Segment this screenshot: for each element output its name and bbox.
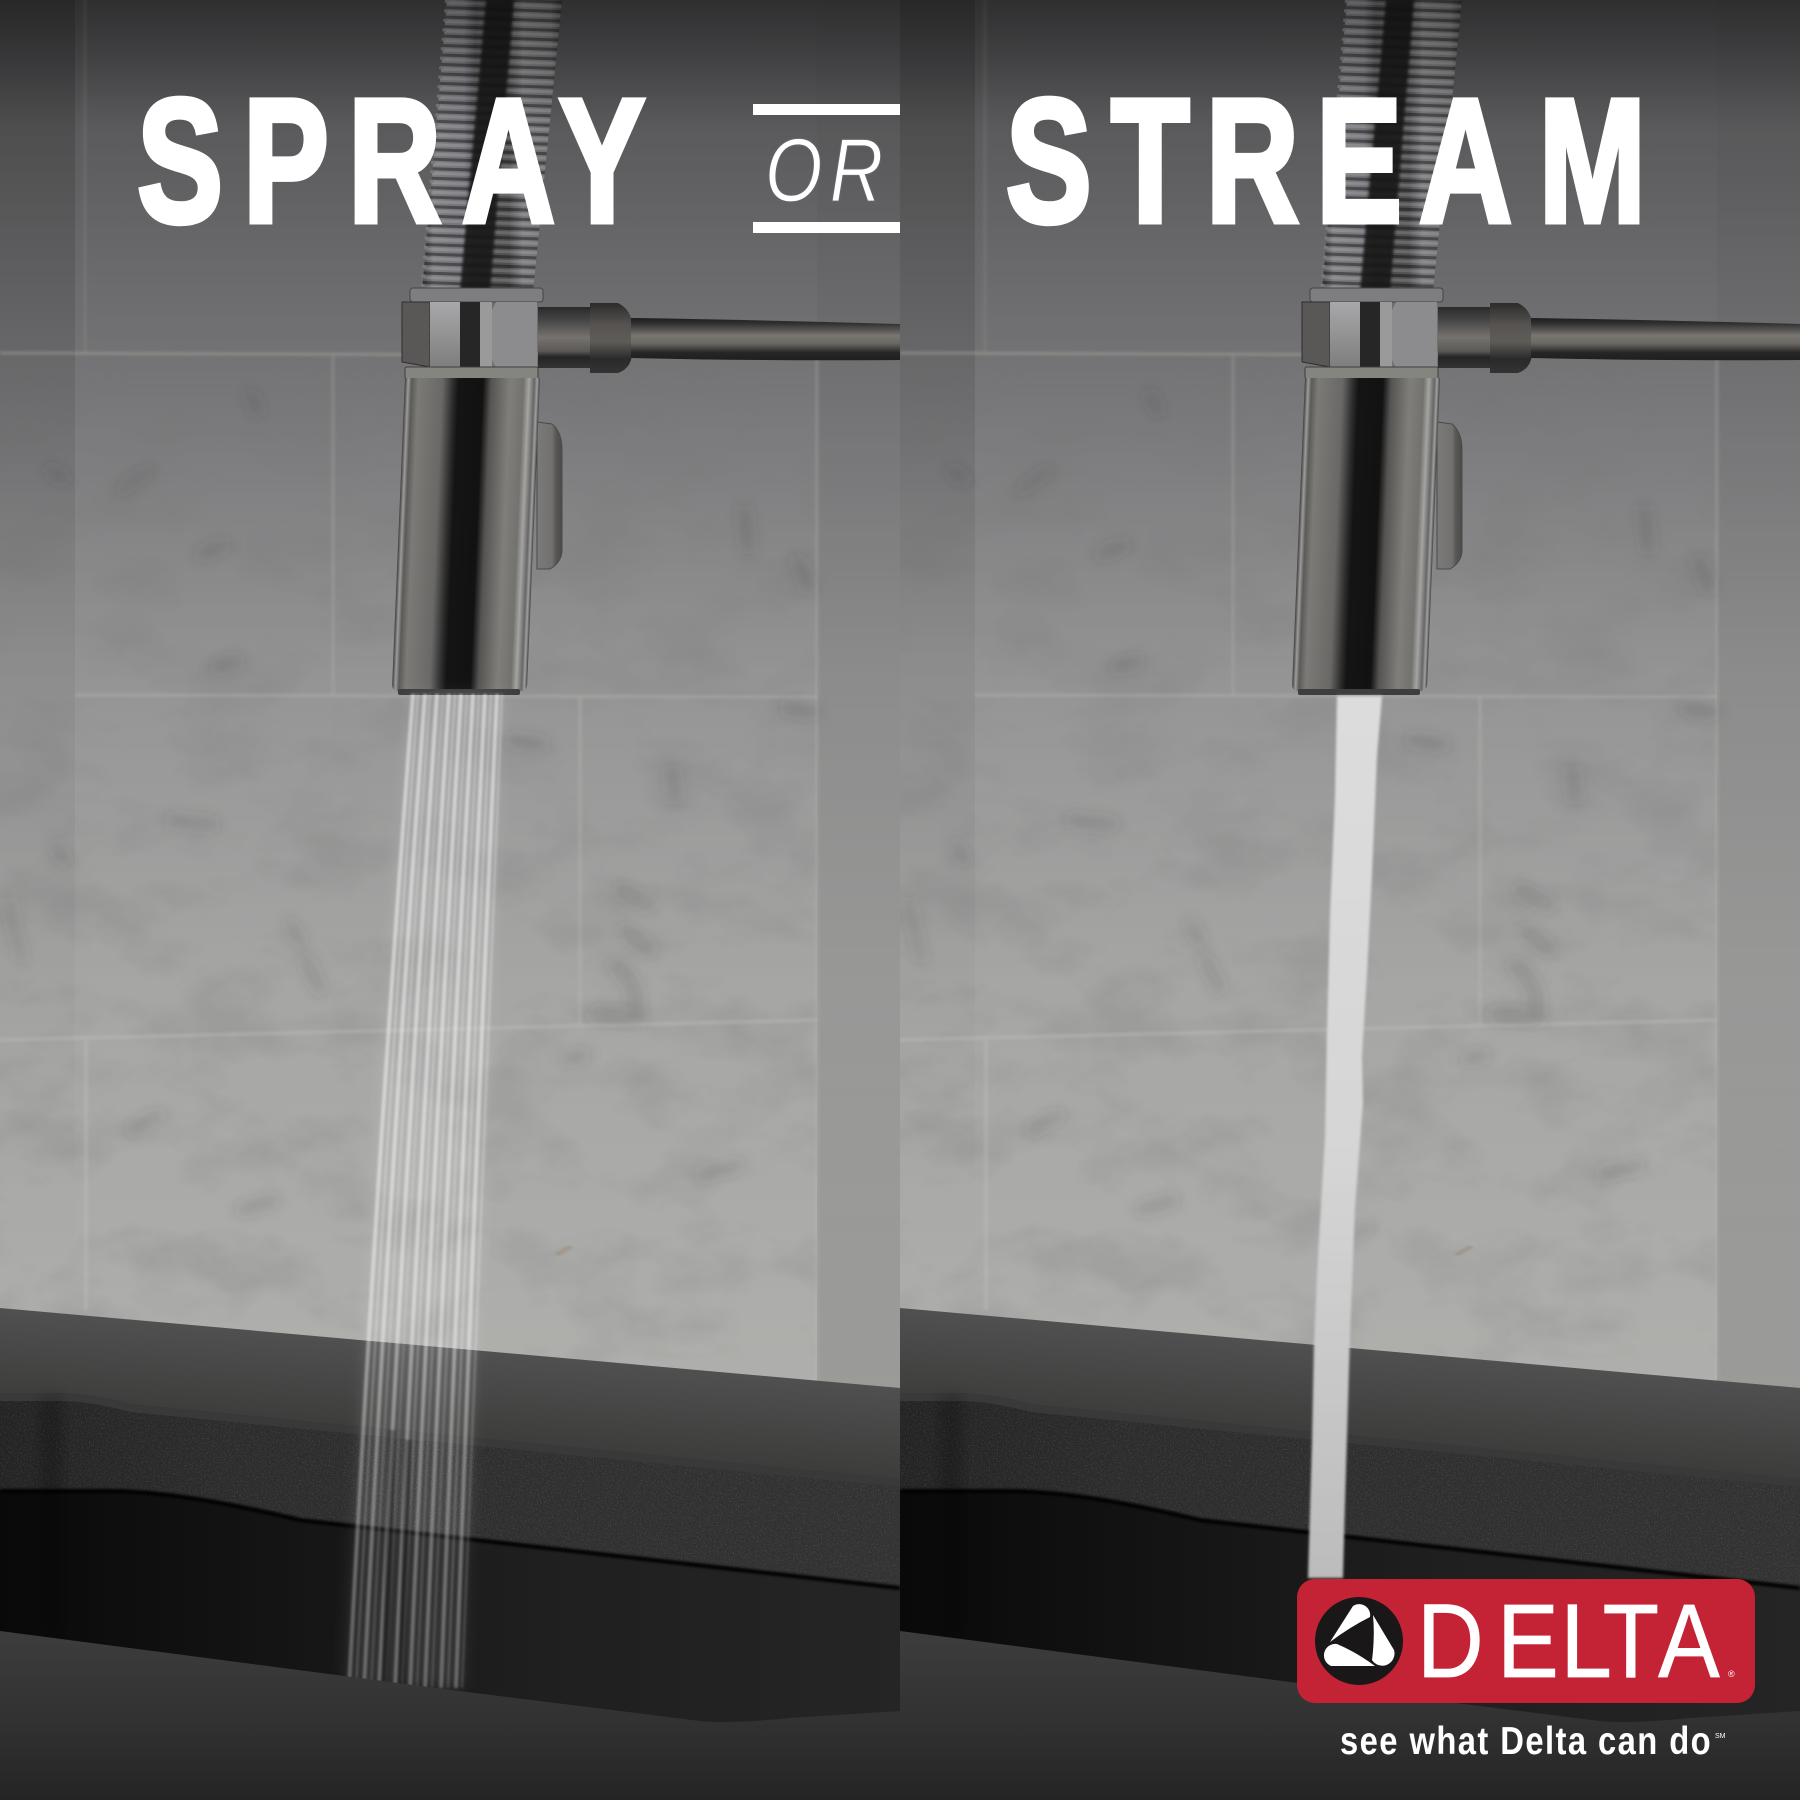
sink front rim: [900, 1631, 1800, 1800]
wordmark: DELTA: DELTA: [1417, 1581, 1720, 1699]
faucet: hose, collar, arm and spray head: [392, 0, 900, 695]
sink front rim: [0, 1631, 900, 1800]
faucet: hose, collar, arm and spray head: [1292, 0, 1800, 695]
stream water: solid column: [1308, 696, 1382, 1578]
marble tile wall: [0, 0, 900, 1388]
icon: Delta triangle mark: [1315, 1597, 1403, 1685]
tagline: see what Delta can do: [1340, 1718, 1712, 1763]
countertop and sink basin: [900, 1308, 1800, 1722]
heading: SPRAY: SPRAY: [137, 63, 645, 259]
registered mark: ®: [1728, 1669, 1735, 1679]
panel: spray (left photo): [0, 0, 900, 1800]
top shadow vignette: [900, 0, 1800, 102]
panel: stream (right photo): [900, 0, 1800, 1800]
tagline: SM: [1715, 1733, 1726, 1740]
heading: OR with rules: [753, 104, 900, 233]
heading: STREAM: STREAM: [1006, 63, 1646, 259]
marble tile wall: [900, 0, 1800, 1388]
spray water: many fine jets: [345, 694, 503, 1688]
heading: OR with rules: OR: [765, 121, 890, 221]
top shadow vignette: [0, 0, 900, 102]
logo: Delta badge: [1297, 1579, 1755, 1703]
countertop and sink basin: [0, 1308, 900, 1722]
